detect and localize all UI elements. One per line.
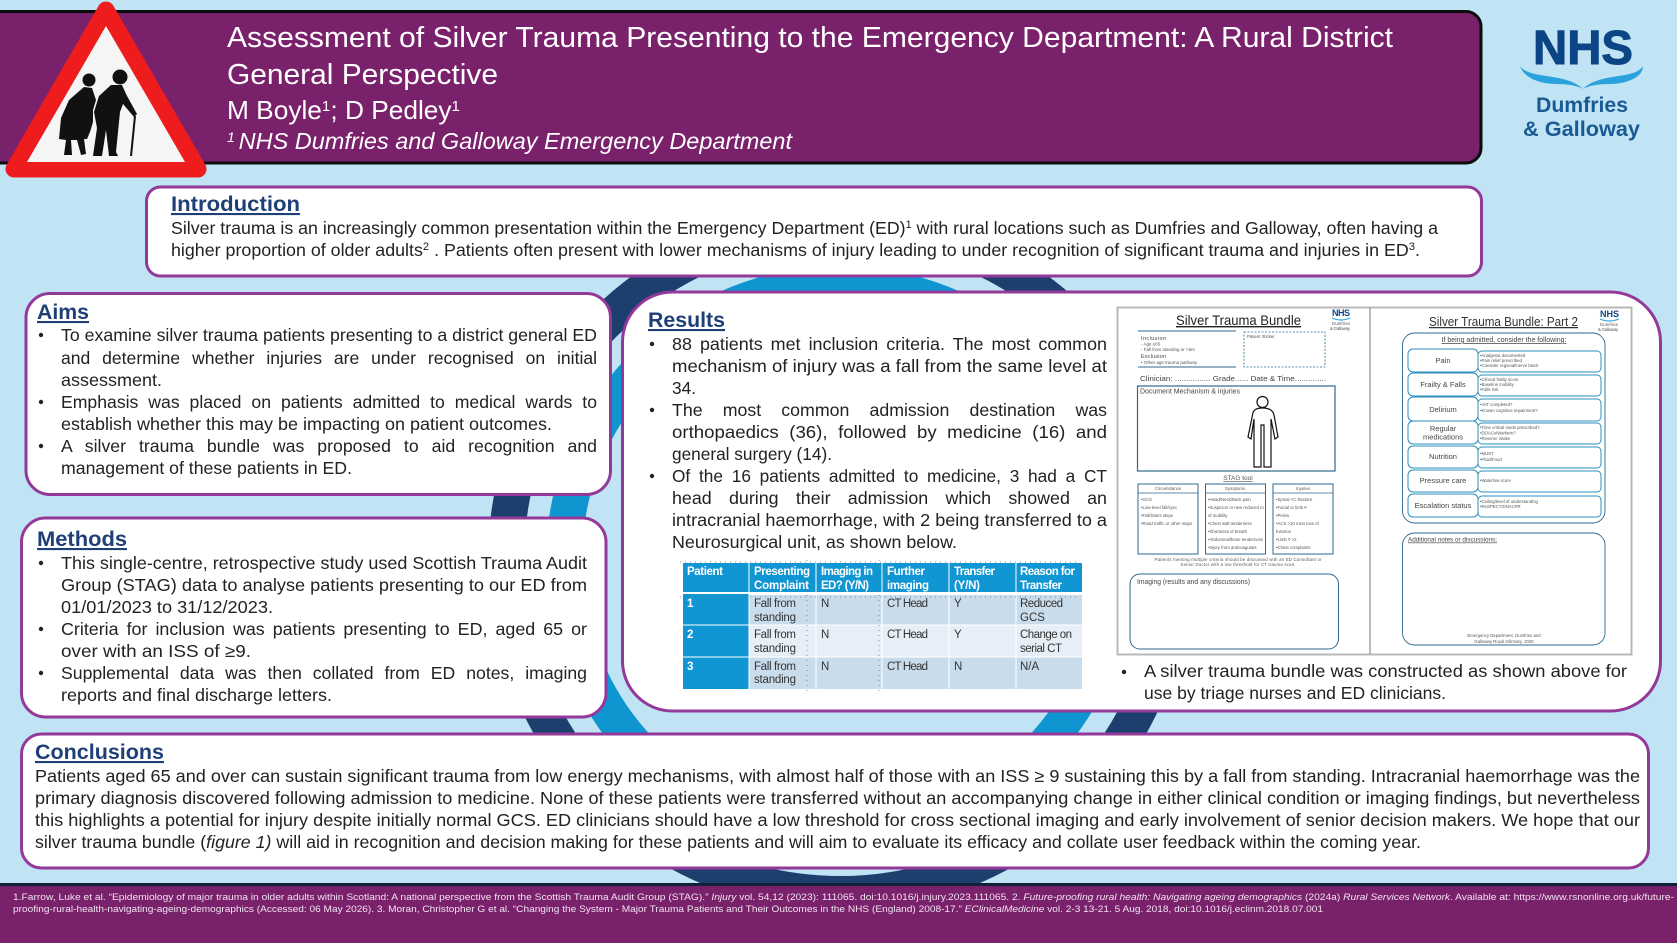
introduction text (171, 218, 1438, 260)
introduction text: Silver trauma is an increasingly common presentation within the Emergency Department (ED) (171, 218, 896, 238)
bundle checklist rows: •4AT completed? (1480, 402, 1513, 407)
background rings (506, 226, 1174, 894)
sheet: bundle part 1 (1130, 308, 1351, 649)
patient table: Y (954, 598, 962, 610)
sheet: bundle part 2: Galloway Royal Infirmary, 2025 (1474, 639, 1534, 644)
bundle checklist rows: medications (1423, 432, 1463, 442)
patient table: standing (754, 674, 796, 686)
patient table: GCS (1020, 612, 1045, 624)
sheet: bundle part 1: & Galloway (1330, 326, 1351, 331)
results bullets: orthopaedics (36), followed by medicine (16) and (672, 422, 1107, 442)
affiliation: 1 (227, 129, 239, 145)
sheet: bundle part 1: STAG tool (1223, 475, 1253, 482)
patient table: standing (754, 643, 796, 655)
sheet: bundle part 2 (1402, 309, 1619, 645)
sheet: bundle part 1: Patients meeting multiple criteria should be discussed with an ED Consultant or (1154, 557, 1322, 562)
sheet: bundle part 1: • Other age trauma pathway (1141, 360, 1198, 365)
sheet: bundle part 1: - Age ≥65 (1141, 342, 1161, 346)
patient table: Change on (1020, 629, 1072, 641)
figure caption bullet (1122, 661, 1627, 703)
bundle checklist rows: •Pain relief prescribed (1480, 358, 1522, 363)
icon: body outline (1248, 396, 1278, 467)
sheet: bundle part 1: •Shortness of breath (1208, 529, 1248, 534)
patient table: Presenting (754, 566, 810, 578)
patient table: CT Head (887, 598, 928, 610)
bundle checklist rows: •Baseline mobility (1480, 382, 1515, 387)
sheet: bundle part 1: Inclusion (1141, 336, 1166, 342)
patient table: Transfer (1020, 580, 1063, 592)
heading: results: Results (648, 309, 725, 332)
sheet: bundle part 1: of mobility (1208, 513, 1228, 518)
patient table: Y (954, 629, 962, 641)
methods bullets: Group (STAG) data to analyse patients presenting to our ED from (61, 575, 587, 595)
bundle checklist rows: •ReSPECT/DNACPR (1480, 504, 1521, 509)
sheet: bundle part 1: Imaging (results and any discussions) (1137, 577, 1250, 586)
references: 1.Farrow, Luke et al. “Epidemiology of major trauma in older adults within Scotland: A national perspective from the Scottish Trauma Audit Group (STAG).” Injury vol. 54,12 (2023): 111065. doi:10.1016/j.injury.2023.111065. 2. Future-proofing rural health: Navigating ageing demographics (2024a) Rural Services Network . Available at: https://www.rsnonline.org.uk/future- (13, 892, 1674, 903)
aims bullets (39, 325, 597, 478)
sheet: bundle part 1: •Head/Neck/Back pain (1208, 497, 1251, 502)
conclusions text: silver trauma bundle (figure 1) will aid in recognition and decision making for these patients and will aim to evaluate its efficacy and collate user feedback within the coming year. (35, 832, 1421, 852)
aims bullets: and determine whether injuries are under recognised on initial (61, 348, 597, 368)
patient table: 1 (687, 598, 694, 610)
title: Assessment of Silver Trauma Presenting to the Emergency Department: A Rural District (227, 22, 1393, 54)
sheet: bundle part 2: Silver Trauma Bundle: Part 2 (1429, 315, 1578, 329)
bundle checklist rows: Pressure care (1420, 476, 1466, 485)
patient table: Reduced (1020, 598, 1063, 610)
bundle checklist rows: •Clinical frailty score (1480, 377, 1519, 382)
figure caption bullet: use by triage nurses and ED clinicians. (1144, 683, 1446, 703)
sheet: bundle part 1: •Suspicion or new reduced m (1208, 505, 1264, 510)
patient table (680, 560, 1082, 692)
header banner (0, 12, 1481, 163)
bundle checklist rows: •Consider regional/nerve block (1480, 363, 1539, 368)
sheet: bundle part 1: Document Mechanism & injuries (1140, 386, 1240, 396)
methods bullets: Criteria for inclusion was patients presenting to ED, aged 65 or (61, 619, 587, 639)
methods bullets: 01/01/2023 to 31/12/2023. (61, 597, 273, 617)
patient table: Further (887, 566, 926, 578)
patient table: (Y/N) (954, 580, 980, 592)
bundle checklist rows: •MUST (1480, 451, 1494, 456)
bundle checklist rows: Regular (1430, 424, 1457, 433)
sheet: bundle part 2: If being admitted, consider the following: (1442, 335, 1566, 344)
sheet: bundle part 1: Senior Doctor with a low threshold for CT trauma scan. (1180, 562, 1296, 567)
aims bullets: assessment. (61, 370, 162, 390)
sheet: bundle part 1: - Fall from standing or <5m (1141, 347, 1195, 352)
conclusions text: primary diagnosis discovered following admission to medicine. None of these patients were transferred without an accompanying change in either clinical condition or imaging findings, but nevertheless (35, 788, 1640, 808)
patient table: Fall from (754, 629, 796, 641)
patient table: N/A (1020, 661, 1040, 673)
sheet: bundle part 1: •Limb # >2 (1276, 537, 1297, 542)
methods bullets: reports and final discharge letters. (61, 685, 332, 705)
introduction text: higher proportion of older adults (171, 240, 418, 260)
bundle checklist rows: Escalation status (1415, 501, 1472, 510)
patient table: imaging (887, 580, 929, 592)
bundle checklist rows: Frailty & Falls (1420, 380, 1466, 389)
sheet: bundle part 2: NHS (1600, 309, 1619, 319)
logo: NHS Dumfries and Galloway (1520, 22, 1643, 141)
introduction text: 3 (1409, 241, 1415, 253)
conclusions text: this highlights a potential for injury despite initially normal GCS. ED clinicians should have a low threshold for cross sectional imaging and early involvement of senior decision makers. We hope that our (35, 810, 1640, 830)
figure: silver trauma bundle (1118, 308, 1632, 654)
heading: aims: Aims (37, 301, 89, 324)
bundle checklist rows: •DOACs/Warfarin? (1480, 430, 1516, 436)
methods bullets: Supplemental data was then collated from ED notes, imaging (61, 663, 587, 683)
panel: aims (26, 294, 610, 494)
sheet: bundle part 1: Symptoms (1225, 486, 1245, 491)
patient table: Complaint (754, 580, 809, 592)
patient table: N (821, 629, 829, 641)
sheet: bundle part 1: •Chest complaints (1276, 545, 1310, 550)
sheet: bundle part 2: Emergency Department, Dumfries and (1467, 633, 1541, 638)
sheet: bundle part 1: function (1276, 529, 1292, 534)
results bullets (650, 334, 1107, 552)
bundle checklist rows: •Known cognitive impairment? (1480, 408, 1538, 413)
results bullets: 88 patients met inclusion criteria. The most common (672, 334, 1107, 354)
sheet: bundle part 1: NHS (1332, 308, 1350, 318)
sheet: bundle part 1: Clinician: ................ Grade...... Date & Time.............. (1140, 374, 1326, 383)
heading: introduction: Introduction (171, 193, 300, 216)
sheet: bundle part 1: Patient Sticker (1247, 334, 1275, 339)
heading: methods: Methods (37, 528, 127, 551)
results bullets: Of the 16 patients admitted to medicine, 3 had a CT (672, 466, 1107, 486)
sheet: bundle part 1: •Injury from anticoagulant (1208, 545, 1257, 550)
bundle checklist rows: Pain (1435, 356, 1451, 365)
results bullets: 34. (672, 378, 696, 398)
panel: conclusions (22, 734, 1648, 868)
patient table: Fall from (754, 598, 796, 610)
panel: methods (22, 518, 606, 717)
sheet: bundle part 2: & Galloway (1598, 327, 1619, 332)
patient table: 2 (687, 629, 693, 641)
patient table: serial CT (1020, 643, 1062, 655)
sheet: bundle part 1: •Spinal <C-fracture (1276, 497, 1313, 502)
sheet: bundle part 1: •ACS >10 mins loss of (1276, 521, 1320, 526)
patient table: standing (754, 612, 796, 624)
sheet: bundle part 1: Dumfries (1332, 321, 1350, 326)
affiliation: NHS Dumfries and Galloway Emergency Department (239, 128, 793, 154)
authors: M Boyle (227, 95, 321, 125)
footer band (0, 883, 1677, 943)
sheet: bundle part 1: Injuries (1296, 486, 1310, 491)
conclusions text (35, 766, 1640, 852)
bundle checklist rows: •Reverse intake (1480, 436, 1511, 441)
patient table: Fall from (754, 661, 796, 673)
heading: conclusions: Conclusions (35, 741, 164, 764)
aims bullets: A silver trauma bundle was proposed to aid recognition and (61, 436, 597, 456)
introduction text: . Patients often present with lower mechanisms of injury leading to under recognition of significant trauma and injuries in ED (429, 240, 1409, 260)
results bullets: general surgery (14). (672, 444, 832, 464)
sheet: bundle part 2: Additional notes or discussions: (1408, 536, 1497, 544)
sheet: bundle part 1: •Facial or limb # (1276, 505, 1307, 510)
bundle checklist rows: •Analgesia documented (1480, 353, 1526, 358)
methods bullets (39, 553, 587, 705)
introduction text: . (1415, 240, 1420, 260)
patient table: N (954, 661, 962, 673)
patient table: ED? (Y/N) (821, 580, 869, 592)
patient table: N (821, 598, 829, 610)
sheet: bundle part 1: •Pelvis (1276, 513, 1289, 518)
bundle checklist rows: •Time critical meds prescribed? (1480, 425, 1540, 430)
methods bullets: This single-centre, retrospective study used Scottish Trauma Audit (61, 553, 587, 573)
introduction text: with rural locations such as Dumfries and Galloway, often having a (912, 218, 1438, 238)
sheet: bundle part 1: •Fall/Stairs steps (1141, 513, 1173, 518)
title line 2: General Perspective (227, 59, 498, 91)
bundle checklist rows (1408, 349, 1601, 517)
results bullets: intracranial haemorrhage, with 2 being transferred to a (672, 510, 1107, 530)
sheet: bundle part 1: •Abdominal/bone tenderness (1208, 537, 1263, 542)
sheet: bundle part 1: •GCS (1141, 497, 1152, 502)
sheet: bundle part 2: Dumfries (1600, 322, 1618, 327)
introduction text: 1 (906, 219, 912, 231)
patient table: 3 (687, 661, 693, 673)
patient table: Transfer (954, 566, 996, 578)
patient table: CT Head (887, 629, 928, 641)
logo: NHS Dumfries and Galloway: & Galloway (1523, 118, 1640, 141)
sheet: bundle part 1: •Low-level fall/sync (1141, 505, 1178, 510)
sheet: bundle part 1: •Chest wall tenderness (1208, 521, 1252, 526)
patient table: N (821, 661, 829, 673)
sheet: bundle part 1: Exclusion (1141, 354, 1166, 360)
patient table: Imaging in (821, 566, 873, 578)
logo: NHS Dumfries and Galloway: Dumfries (1536, 94, 1628, 117)
results bullets: The most common admission destination was (672, 400, 1107, 420)
bundle checklist rows: •Waterlow score (1480, 478, 1512, 483)
icon: elderly people warning sign (14, 10, 198, 169)
aims bullets: To examine silver trauma patients presenting to a district general ED (61, 325, 597, 345)
panel: results (622, 292, 1660, 711)
patient table: CT Head (887, 661, 928, 673)
authors: ; D Pedley (330, 95, 452, 125)
bundle checklist rows: Nutrition (1429, 452, 1457, 461)
results bullets: Neurosurgical unit, as shown below. (672, 532, 957, 552)
conclusions text: Patients aged 65 and over can sustain significant trauma from low energy mechanisms, with almost half of those with an ISS ≥ 9 sustaining this by a fall from standing. Intracranial haemorrhage was the (35, 766, 1640, 786)
bundle checklist rows: •Ceiling/level of understanding (1480, 499, 1538, 504)
authors: 1 (452, 98, 460, 115)
results bullets: mechanism of injury was a fall from the same level at (672, 356, 1107, 376)
patient table: Reason for (1020, 566, 1076, 578)
introduction text: 2 (423, 241, 429, 253)
bundle checklist rows: •Falls risk (1480, 387, 1499, 392)
methods bullets: over with an ISS of ≥9. (61, 641, 251, 661)
bundle checklist rows: •Fluid/Food (1480, 457, 1502, 462)
authors: 1 (322, 98, 330, 115)
sheet: bundle part 1: Circumstance (1155, 486, 1182, 491)
sheet: bundle part 1: •Road traffic or other major (1141, 521, 1193, 526)
panel: introduction (146, 187, 1482, 276)
figure caption bullet: A silver trauma bundle was constructed as shown above for (1144, 661, 1627, 681)
patient table: Patient (687, 566, 723, 578)
sheet: bundle part 1: Silver Trauma Bundle (1176, 312, 1301, 328)
logo: NHS Dumfries and Galloway: NHS (1533, 22, 1633, 75)
aims bullets: Emphasis was placed on patients admitted to medical wards to (61, 392, 597, 412)
results bullets: head during their admission which showed an (672, 488, 1107, 508)
aims bullets: management of these patients in ED. (61, 458, 352, 478)
bundle checklist rows: Delirium (1429, 405, 1457, 414)
aims bullets: establish whether this may be impacting on patient outcomes. (61, 414, 552, 434)
references line 2: proofing-rural-health-navigating-ageing-demographics (Accessed: 06 May 2026). 3. Moran, Christopher G et al. “Changing the System - Major Trauma Patients and Their Outcomes in the NHS (England) 2008-17.” EClinicalMedicine vol. 2-3 13-21. 5 Aug. 2018, doi:10.1016/j.eclinm.2018.07.001 (13, 904, 1323, 915)
